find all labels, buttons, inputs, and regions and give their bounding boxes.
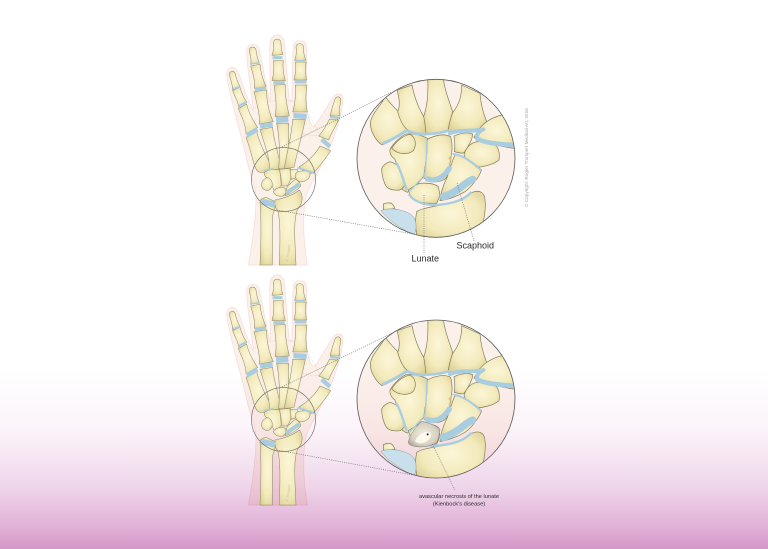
necrotic lunate <box>408 421 440 447</box>
top magnifier ring and dotted connectors <box>252 92 413 234</box>
callout: avascular necrosis of the lunate: (Kienbock's disease) <box>433 502 485 508</box>
bottom detail circle: wrist with necrotic lunate <box>357 319 518 481</box>
label: Lunate: Lunate <box>412 254 439 264</box>
bottom hand skeleton illustration <box>227 275 343 505</box>
top detail circle: wrist bones <box>357 78 518 240</box>
callout: avascular necrosis of the lunate <box>419 444 499 508</box>
top hand skeleton illustration <box>227 35 343 265</box>
label: Lunate <box>412 195 439 264</box>
callout: avascular necrosis of the lunate: avascular necrosis of the lunate <box>419 494 499 500</box>
label: Scaphoid: Scaphoid <box>456 240 494 250</box>
bottom magnifier ring and dotted connectors <box>252 333 413 475</box>
copyright note: © Copyright: Rogier Trompert Medical Art, 2016 <box>523 108 529 207</box>
label: Scaphoid <box>456 183 494 250</box>
